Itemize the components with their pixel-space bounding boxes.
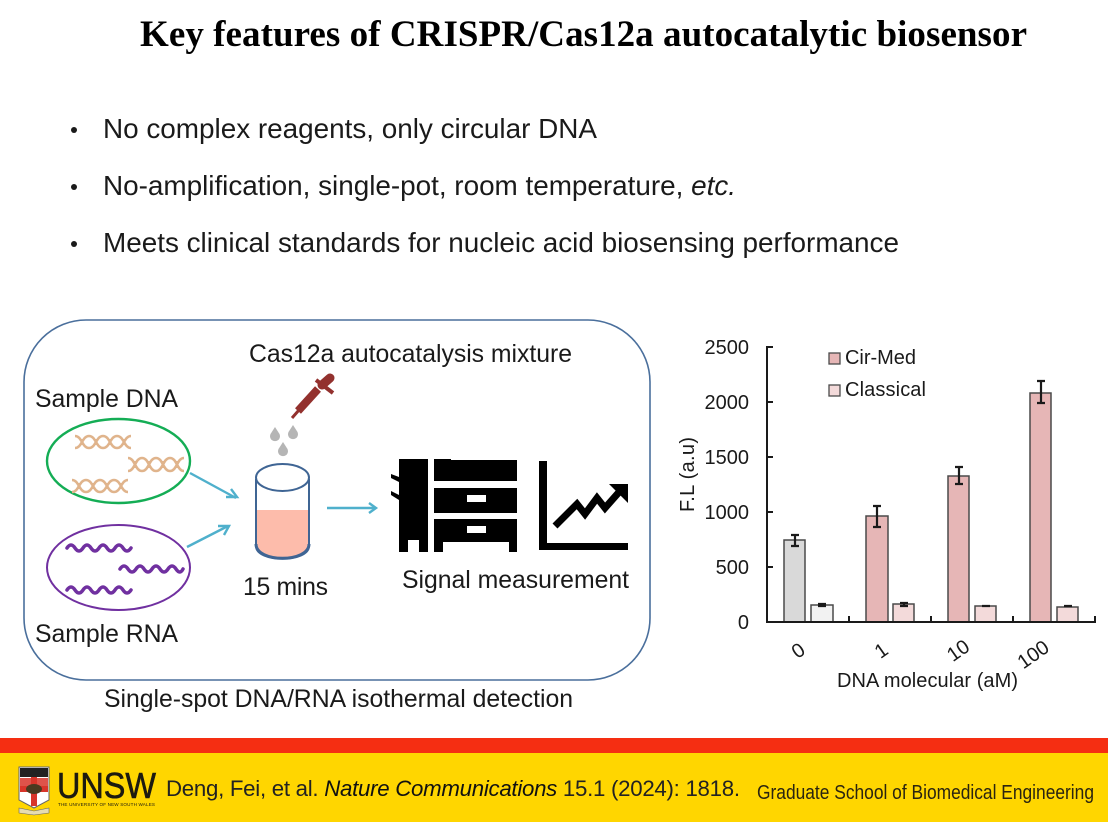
panel caption: Single-spot DNA/RNA isothermal detection xyxy=(104,686,573,713)
icon: instrument xyxy=(391,459,517,552)
y axis title: F.L (a.u) xyxy=(677,437,699,512)
x axis labels: 100 xyxy=(1014,637,1054,674)
y axis labels: 0 xyxy=(738,612,749,634)
arrow: RNA to tube xyxy=(187,526,229,547)
icon: UNSW crest xyxy=(19,767,49,815)
icon: DNA helices xyxy=(72,436,184,492)
y axis labels: 1500 xyxy=(704,447,749,469)
x axis labels xyxy=(788,636,1054,674)
icon: drops xyxy=(270,425,298,456)
axes xyxy=(767,347,1096,622)
legend xyxy=(829,347,926,401)
icon: dropper xyxy=(292,378,333,418)
label: sample RNA: Sample RNA xyxy=(35,621,178,648)
red stripe xyxy=(0,738,1108,753)
arrow: DNA to tube xyxy=(190,473,237,498)
y axis labels xyxy=(704,337,749,634)
x axis labels: 1 xyxy=(871,639,892,663)
icon: trend graph xyxy=(539,461,628,550)
citation: Deng, Fei, et al. Nature Communications 15.1 (2024): 1818. xyxy=(166,776,740,801)
label: signal measurement: Signal measurement xyxy=(402,567,629,594)
x axis labels: 10 xyxy=(943,636,974,666)
label: sample DNA: Sample DNA xyxy=(35,386,178,413)
icon: tube xyxy=(256,464,309,559)
x axis labels: 0 xyxy=(788,639,809,663)
panel border xyxy=(24,320,650,680)
legend: Classical xyxy=(845,379,926,401)
yellow strip xyxy=(0,753,1108,822)
logo: UNSW wordmark: UNSW xyxy=(57,765,156,806)
y axis labels: 2000 xyxy=(704,392,749,414)
label: mixture: Cas12a autocatalysis mixture xyxy=(249,341,572,368)
x axis title: DNA molecular (aM) xyxy=(837,670,1018,692)
bullet 1: No complex reagents, only circular DNA xyxy=(103,113,597,144)
title: Key features of CRISPR/Cas12a autocatalytic biosensor xyxy=(140,14,1027,55)
y axis labels: 2500 xyxy=(704,337,749,359)
error bars xyxy=(791,381,1072,607)
logo subline: THE UNIVERSITY OF NEW SOUTH WALES xyxy=(58,802,155,807)
label: 15 mins: 15 mins xyxy=(243,574,328,601)
bullet 3: Meets clinical standards for nucleic acid biosensing performance xyxy=(103,227,899,258)
y axis labels: 1000 xyxy=(704,502,749,524)
bar chart xyxy=(677,337,1096,692)
bullet 2: No-amplification, single-pot, room temperature, etc. xyxy=(103,170,736,201)
footer band xyxy=(0,738,1108,822)
ellipse: sample DNA xyxy=(47,419,190,503)
y axis labels: 500 xyxy=(716,557,749,579)
bars xyxy=(784,393,1078,622)
icon: RNA strands xyxy=(67,545,183,593)
arrow: tube to instrument xyxy=(327,503,376,513)
bullet list xyxy=(71,113,899,258)
legend: Cir-Med xyxy=(845,347,916,369)
ellipse: sample RNA xyxy=(47,525,190,610)
panel: workflow diagram xyxy=(24,320,650,680)
